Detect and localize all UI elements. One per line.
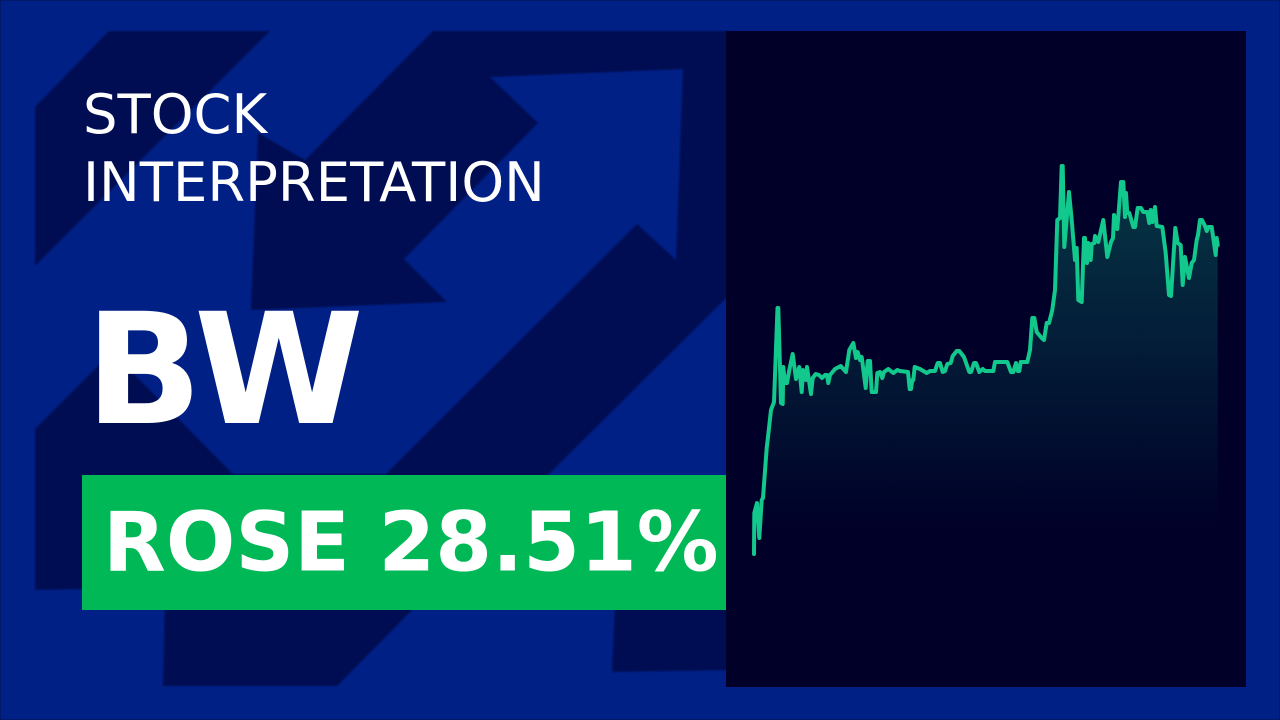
arrow: bottom right fragment bbox=[612, 605, 730, 672]
arrow: top left bbox=[35, 31, 270, 266]
title bbox=[83, 83, 545, 214]
ticker: BW bbox=[85, 281, 364, 460]
price line bbox=[754, 166, 1218, 554]
title: INTERPRETATION bbox=[83, 151, 545, 214]
title: STOCK bbox=[83, 83, 269, 146]
arrow: large central with highlighted cut-out bbox=[35, 31, 730, 686]
area under price line bbox=[754, 166, 1218, 560]
change badge bbox=[82, 475, 727, 610]
chart panel bbox=[726, 31, 1246, 687]
change badge: ROSE 28.51% bbox=[103, 496, 719, 590]
background arrows bbox=[35, 31, 730, 686]
